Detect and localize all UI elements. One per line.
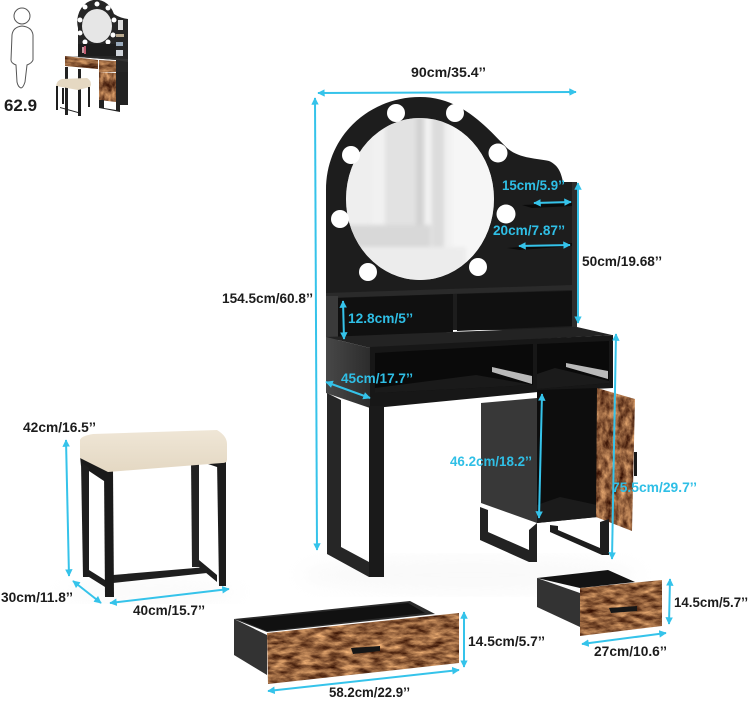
dim: desk depth: 45cm/17.7’’ bbox=[341, 370, 413, 386]
right opening bbox=[537, 341, 609, 389]
right side panel bbox=[572, 182, 577, 327]
dim: stool height bbox=[23, 419, 96, 576]
cabinet side bbox=[481, 398, 537, 523]
desk front face bbox=[370, 335, 613, 408]
dim: stool width: 40cm/15.7’’ bbox=[133, 602, 205, 618]
vanity light bulbs bbox=[331, 104, 516, 281]
dim: upper shelf bbox=[502, 177, 571, 203]
dim: large drawer width bbox=[268, 670, 459, 700]
left opening bbox=[375, 344, 533, 393]
dim: hutch opening: 12.8cm/5’’ bbox=[348, 310, 413, 326]
dim: hutch height bbox=[578, 183, 662, 323]
dim: overall width: 90cm/35.4’’ bbox=[411, 64, 486, 80]
person height reference icon bbox=[11, 8, 33, 88]
dim: desk depth bbox=[326, 370, 413, 398]
backboard bbox=[326, 97, 576, 340]
front rail bbox=[113, 567, 207, 583]
dim: desk height: 75.5cm/29.7’’ bbox=[612, 479, 697, 495]
drawer side bbox=[537, 578, 580, 627]
dim: large drawer width: 58.2cm/22.9’’ bbox=[329, 684, 410, 700]
dim: large drawer height bbox=[464, 612, 545, 667]
back right leg bbox=[191, 460, 199, 567]
small drawer bbox=[537, 570, 662, 636]
small side shelves bbox=[507, 203, 572, 250]
dim: hutch opening bbox=[343, 301, 413, 339]
person height value: 62.9 bbox=[4, 96, 37, 115]
drawer interior bbox=[234, 601, 435, 632]
dim: large drawer height: 14.5cm/5.7’’ bbox=[468, 633, 545, 649]
dim: lower shelf: 20cm/7.87’’ bbox=[493, 222, 565, 238]
dim: stool depth bbox=[1, 581, 101, 605]
dim: small drawer width bbox=[582, 633, 667, 659]
back left leg bbox=[81, 462, 89, 577]
cabinet back leg frame bbox=[550, 519, 609, 555]
dim: lower shelf bbox=[493, 222, 570, 246]
drawer handle bbox=[351, 646, 380, 654]
back left leg bbox=[327, 393, 369, 577]
cabinet interior bbox=[537, 388, 598, 523]
dim: hutch height: 50cm/19.68’’ bbox=[582, 253, 662, 269]
dim: desk height bbox=[612, 334, 697, 559]
drawer handle bbox=[609, 606, 637, 613]
dim: small drawer height bbox=[669, 579, 748, 624]
drawer slide rails bbox=[492, 367, 532, 384]
door handle bbox=[634, 452, 637, 476]
dim: stool width bbox=[110, 589, 229, 618]
under-seat apron bbox=[80, 456, 226, 482]
desk left side bbox=[326, 337, 370, 408]
dim: stool height: 42cm/16.5’’ bbox=[23, 419, 96, 435]
dim: stool depth: 30cm/11.8’’ bbox=[1, 589, 73, 605]
dim: cabinet inner height: 46.2cm/18.2’’ bbox=[450, 453, 532, 469]
front right leg bbox=[217, 460, 226, 586]
desk body bbox=[326, 327, 637, 577]
drawer side bbox=[234, 619, 267, 675]
dim: overall height: 154.5cm/60.8’’ bbox=[222, 290, 313, 306]
round mirror bbox=[346, 118, 494, 280]
cushion bbox=[80, 430, 227, 472]
front left leg bbox=[104, 470, 114, 597]
drawer interior bbox=[537, 570, 635, 588]
hutch shelf board and openings bbox=[326, 285, 572, 298]
front left leg bbox=[369, 406, 384, 577]
vanity head panel with mirror bbox=[326, 97, 577, 342]
floor shadows bbox=[60, 557, 640, 602]
dim: cabinet inner height bbox=[450, 394, 542, 518]
dim: small drawer width: 27cm/10.6’’ bbox=[594, 643, 667, 659]
cabinet door bbox=[596, 388, 635, 531]
side rails bbox=[89, 560, 217, 587]
drawer wood front bbox=[580, 580, 662, 636]
cabinet front leg frame bbox=[480, 507, 537, 562]
dim: small drawer height: 14.5cm/5.7’’ bbox=[674, 594, 748, 610]
desk top surface bbox=[326, 327, 612, 348]
drawer wood front bbox=[267, 613, 459, 684]
large drawer bbox=[234, 601, 459, 684]
stool bbox=[80, 430, 227, 597]
dim: upper shelf: 15cm/5.9’’ bbox=[502, 177, 565, 193]
thumbnail: vanity and stool in scale bbox=[56, 0, 128, 116]
